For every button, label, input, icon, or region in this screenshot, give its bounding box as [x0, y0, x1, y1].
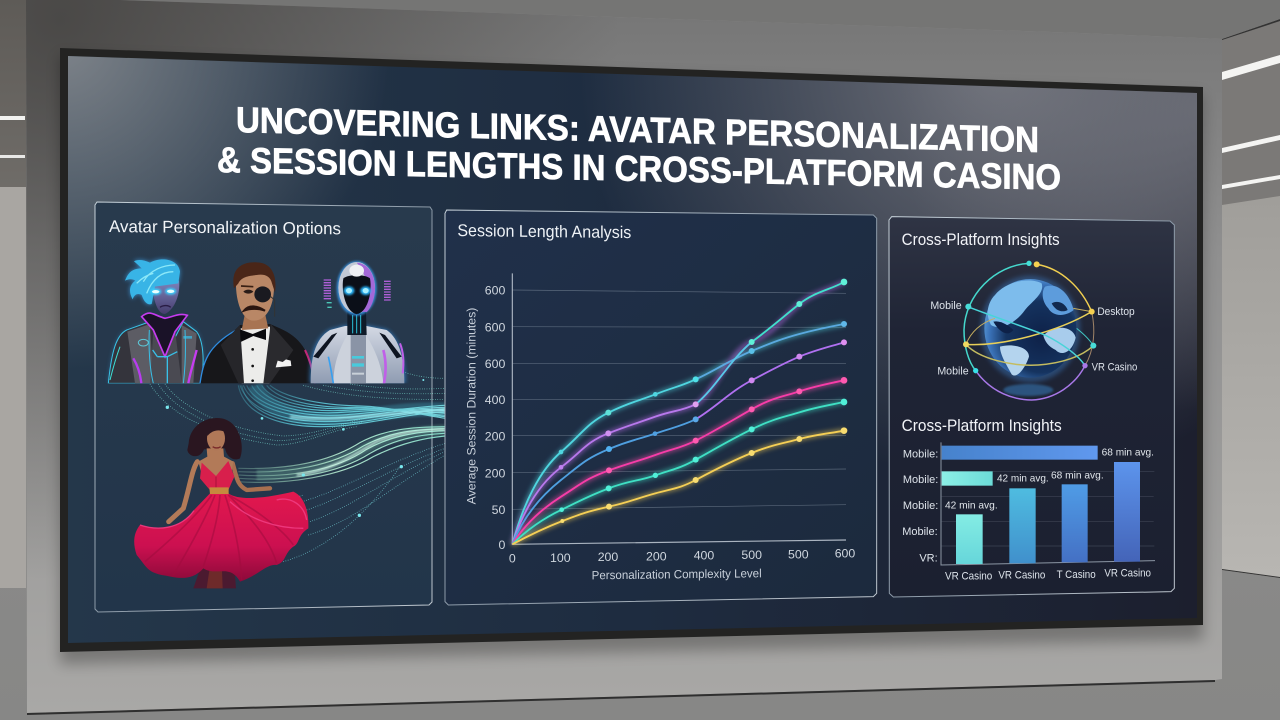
column labels: VR Casino: [945, 571, 992, 583]
panel heading: session length: Session Length Analysis: [457, 221, 631, 242]
avatar: neon hair character: [108, 259, 203, 383]
bar value labels: 68 min avg.: [1102, 448, 1154, 459]
orbit rings: [964, 263, 1094, 400]
bar value labels: 42 min avg.: [945, 500, 998, 511]
woman in flowing red dress: [134, 418, 308, 588]
panel heading: globe section: Cross-Platform Insights: [902, 230, 1060, 249]
x axis tick labels: [509, 546, 855, 565]
title: & SESSION LENGTHS IN CROSS-PLATFORM CASINO: [217, 139, 1061, 198]
bar value labels: 68 min avg.: [1051, 470, 1104, 481]
y axis tick labels: 0: [498, 538, 505, 552]
title: [217, 99, 1061, 198]
row labels: VR:: [919, 553, 938, 565]
row labels: Mobile:: [903, 500, 938, 512]
column labels: [945, 568, 1151, 583]
y axis tick labels: 50: [492, 503, 505, 517]
x axis tick labels: 200: [598, 550, 618, 564]
axis titles: Personalization Complexity Level: [592, 566, 762, 582]
column labels: VR Casino: [1104, 568, 1151, 580]
horizontal bars: [942, 446, 1098, 486]
y axis tick labels: 400: [485, 393, 505, 407]
series: line five: [512, 399, 847, 544]
panel heading: avatar options: Avatar Personalization Options: [109, 217, 341, 238]
series: line one: [512, 321, 847, 544]
line chart: [465, 273, 855, 582]
row labels: Mobile:: [903, 448, 938, 460]
platform labels: Mobile: [930, 300, 962, 312]
series: line six: [512, 427, 847, 544]
row labels: Mobile:: [903, 474, 938, 486]
panel: avatar personalization options: [95, 202, 432, 612]
x axis tick labels: 500: [788, 547, 809, 561]
avatar: man in tuxedo with eye patch: [200, 262, 315, 383]
vertical bars: [956, 462, 1140, 564]
column labels: T Casino: [1057, 569, 1096, 581]
ceiling: [120, 0, 1280, 39]
series: line three: [512, 339, 847, 544]
panel heading: bar section: Cross-Platform Insights: [902, 416, 1062, 435]
y axis tick labels: 200: [485, 430, 505, 444]
avatar: silver robot: [310, 261, 405, 383]
x axis tick labels: 400: [694, 549, 714, 563]
row labels: Mobile:: [902, 526, 938, 538]
line glow layer: [512, 282, 844, 544]
y axis tick labels: 600: [485, 357, 505, 371]
avatar lineup: [108, 259, 405, 383]
line chart: Average Session Duration (minutes): [465, 308, 479, 504]
y axis tick labels: 600: [485, 284, 505, 298]
column labels: VR Casino: [998, 570, 1045, 582]
panel: cross-platform insights: [889, 217, 1174, 597]
network nodes: [963, 261, 1096, 373]
x axis tick labels: 600: [835, 546, 855, 560]
x axis tick labels: 0: [509, 551, 516, 565]
bar chart: [902, 442, 1155, 583]
platform labels: Desktop: [1097, 306, 1135, 318]
series: line four: [512, 377, 847, 544]
panel: session length analysis: [445, 210, 877, 605]
y axis tick labels: 200: [485, 466, 505, 480]
display screen: [68, 56, 1197, 643]
row labels: [902, 448, 938, 565]
y axis tick labels: 600: [485, 320, 505, 334]
data streams flowing to chart: [150, 372, 445, 562]
display bezel: [60, 48, 1203, 664]
x axis tick labels: 100: [550, 551, 571, 565]
platform labels: [930, 300, 1137, 377]
y axis tick labels: [485, 284, 505, 552]
platform labels: VR Casino: [1092, 362, 1137, 374]
bar value labels: [945, 448, 1154, 511]
x axis tick labels: 200: [646, 549, 667, 563]
platform labels: Mobile: [937, 365, 969, 377]
globe network diagram: [930, 261, 1137, 400]
globe continents: [988, 281, 1076, 376]
bar value labels: 42 min avg.: [997, 474, 1049, 485]
series: line two: [512, 279, 847, 544]
title: UNCOVERING LINKS: AVATAR PERSONALIZATION: [236, 99, 1039, 160]
x axis tick labels: 500: [741, 548, 762, 562]
